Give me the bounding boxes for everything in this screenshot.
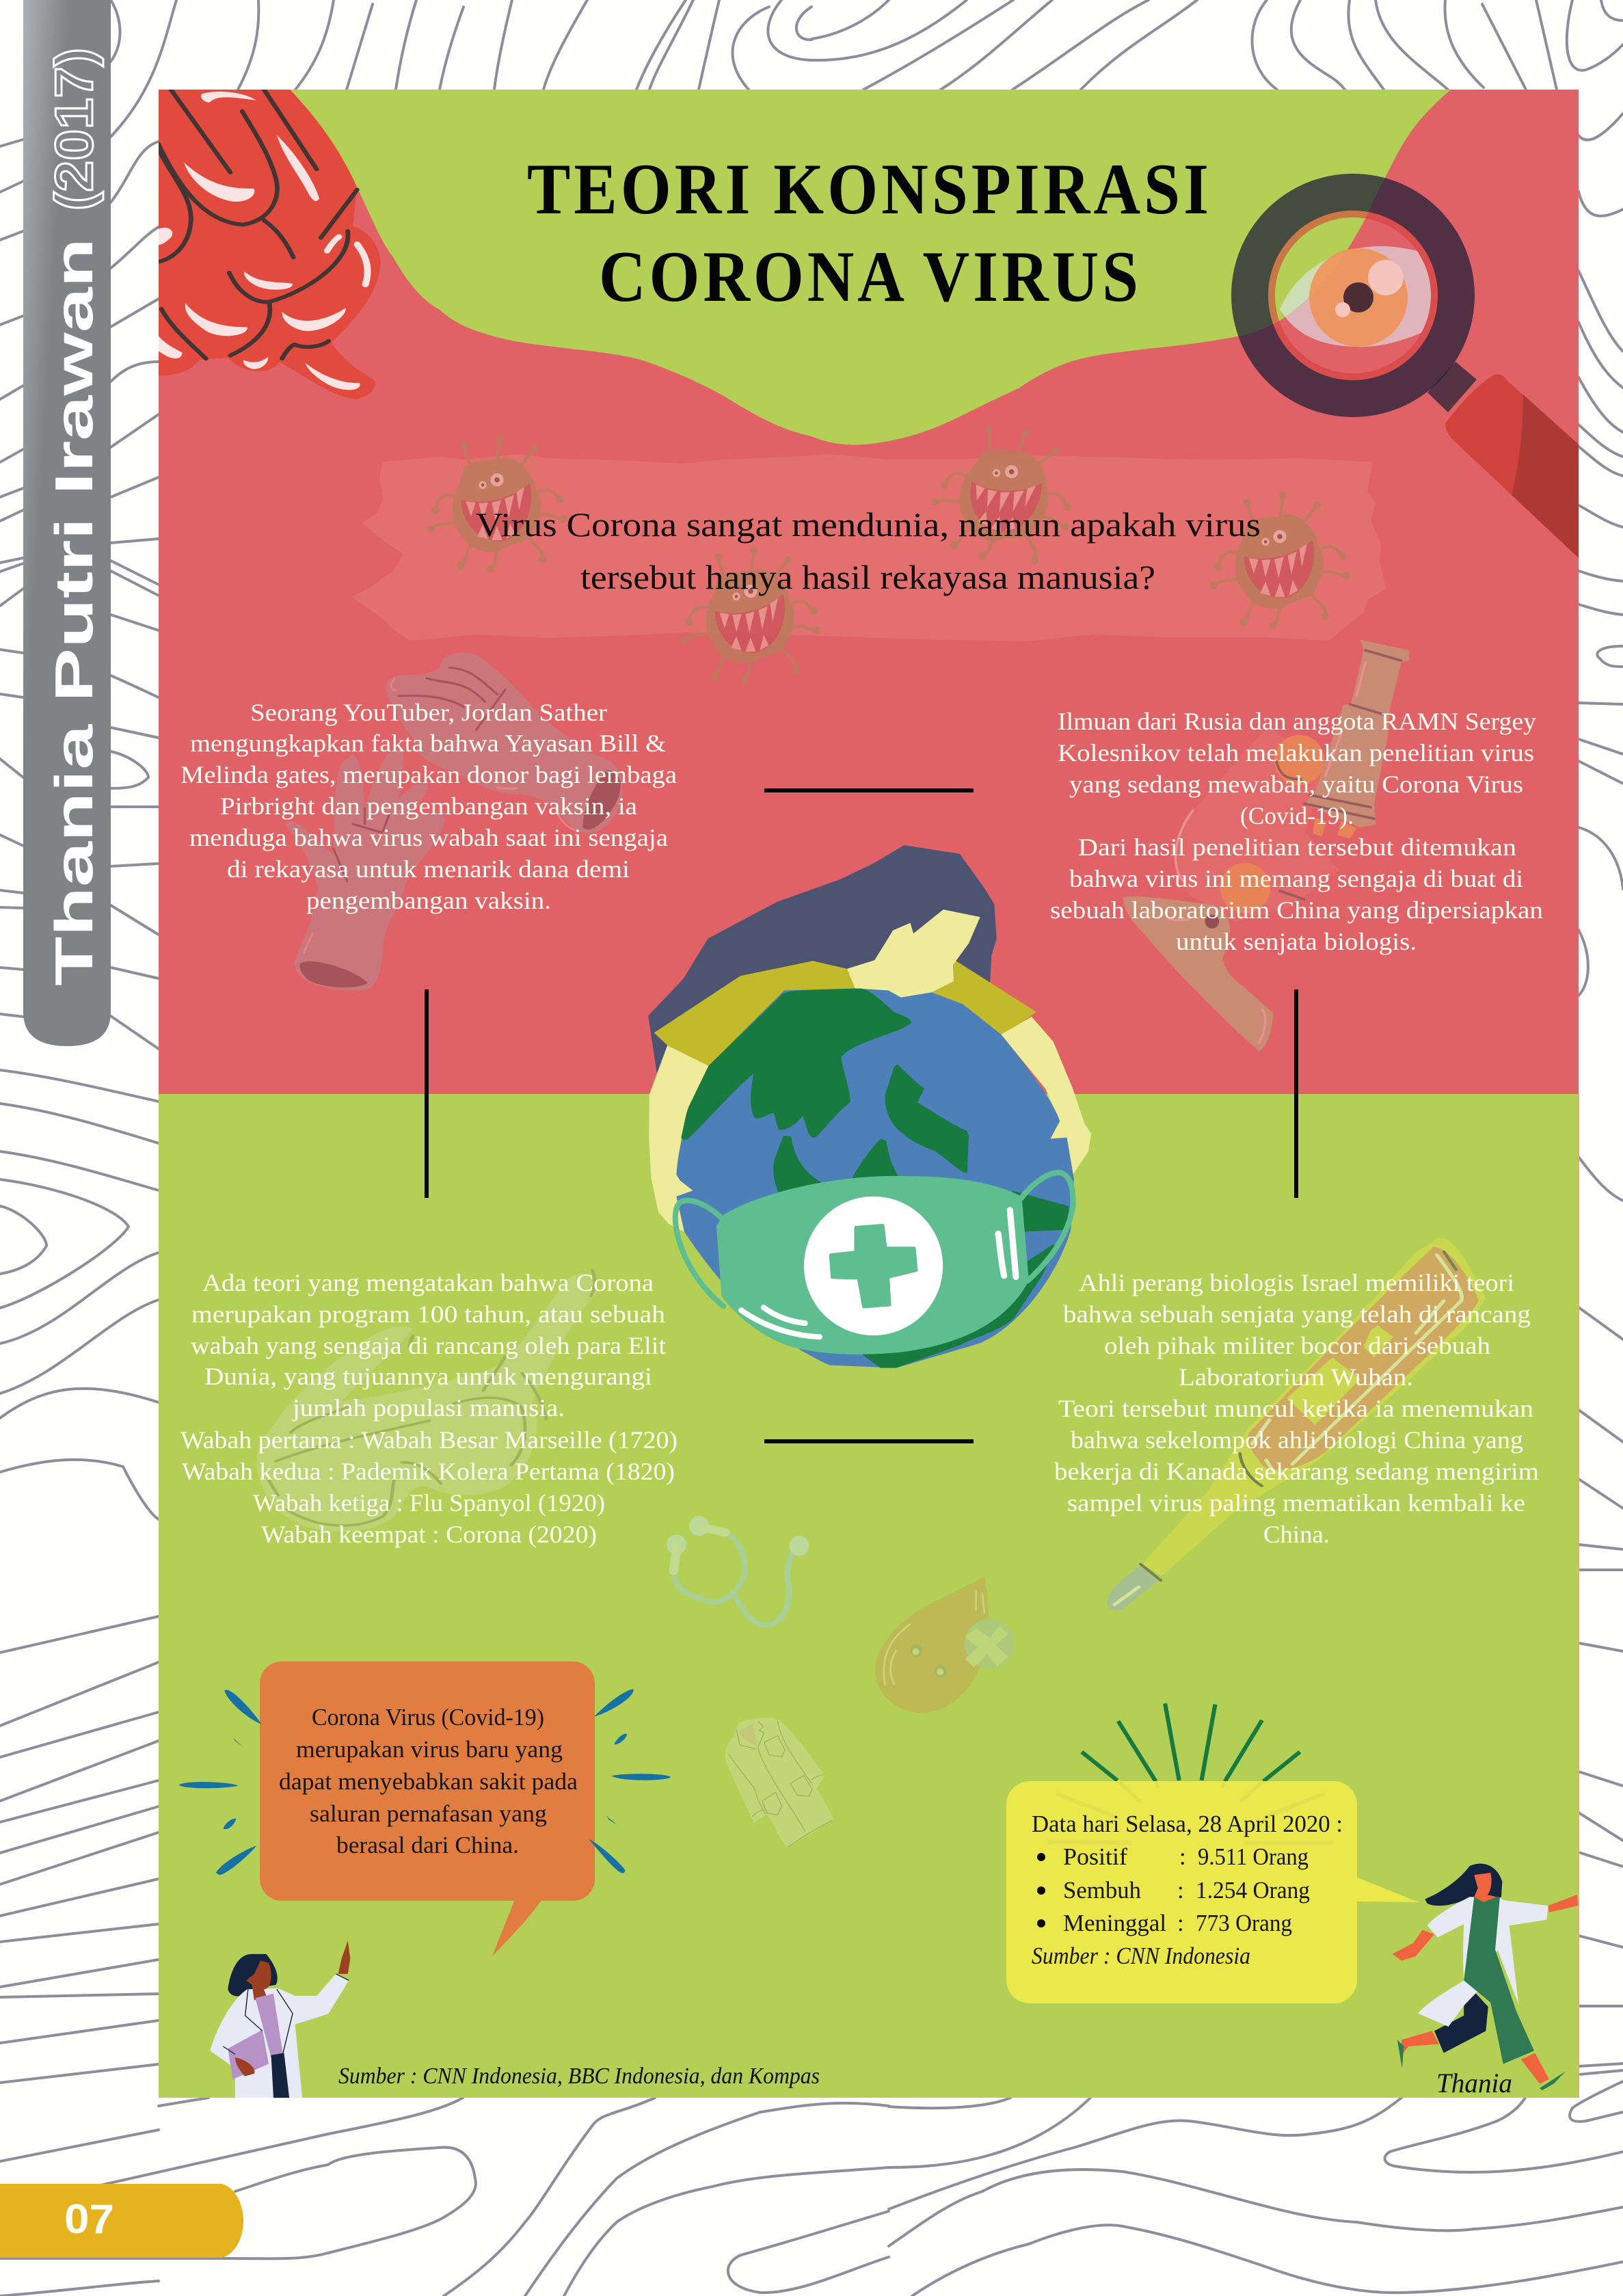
callout: orange speech bubble: merupakan virus baru yang [296,1736,563,1763]
text block: bottom-right theory: Ahli perang biologis Israel memiliki teori [1079,1269,1514,1296]
callout: yellow data bubble: 9.511 Orang [1198,1843,1309,1870]
callout: yellow data bubble [1006,1781,1419,2003]
header green blob [290,90,1451,445]
icon: faint microscope [1123,640,1409,1052]
text block: top-right theory: yang sedang mewabah, yaitu Corona Virus [1069,771,1523,798]
text block: top-right theory [1050,708,1543,955]
icon: magnifying glass with eye [1231,174,1579,558]
title [527,148,1209,317]
callout: orange speech bubble [260,1661,595,1956]
page number tab: 07 [64,2196,114,2242]
sidebar tab with author name [23,0,111,1046]
question text [476,505,1261,596]
sidebar tab with author name: Thania Putri Irawan [44,238,104,986]
title: TEORI KONSPIRASI [527,148,1209,229]
text block: top-right theory: Ilmuan dari Rusia dan anggota RAMN Sergey [1058,708,1536,735]
callout: yellow data bubble: Data hari Selasa, 28 April 2020 : [1032,1811,1343,1837]
icon: green sunburst rays [1082,1703,1300,1781]
callout: yellow data bubble: 773 Orang [1196,1910,1292,1936]
divider lines around globe [425,788,1298,1443]
callout: yellow data bubble: : [1179,1843,1186,1870]
icon: blue burst rays [179,1689,671,1875]
text block: bottom-left theory [180,1269,678,1548]
callout: yellow data bubble: Meninggal [1063,1910,1166,1936]
icon: faint thermometer [1107,1238,1486,1610]
text block: top-left theory [180,699,677,914]
text block: top-left theory: Pirbright dan pengembangan vaksin, ia [220,792,637,820]
text block: top-right theory: bahwa virus ini memang sengaja di buat di [1069,865,1523,892]
text block: top-right theory: Kolesnikov telah melakukan penelitian virus [1058,739,1534,766]
callout: yellow data bubble: Sembuh [1063,1877,1141,1904]
text block: top-left theory: menduga bahwa virus wabah saat ini sengaja [189,824,668,851]
text block: top-left theory: Seorang YouTuber, Jordan Sather [250,699,607,726]
callout: orange speech bubble: dapat menyebabkan sakit pada [279,1768,578,1795]
text block: top-right theory: sebuah laboratorium China yang dipersiapkan [1050,896,1543,924]
text block: bottom-right theory: Laboratorium Wuhan. [1179,1363,1413,1391]
text block: bottom-right theory: bahwa sebuah senjata yang telah di rancang [1063,1300,1531,1328]
title: CORONA VIRUS [599,236,1138,317]
callout: yellow data bubble: 1.254 Orang [1196,1877,1310,1904]
text block: top-left theory: mengungkapkan fakta bahwa Yayasan Bill & [190,730,666,757]
text block: bottom-right theory: bahwa sekelompok ahli biologi China yang [1071,1426,1523,1454]
text block: bottom-right theory [1054,1269,1539,1548]
question text: Virus Corona sangat mendunia, namun apakah virus [476,505,1261,544]
text block: top-left theory: pengembangan vaksin. [306,887,551,914]
text block: top-right theory: untuk senjata biologis. [1176,928,1417,955]
virus decorations [427,410,1350,684]
text block: bottom-right theory: sampel virus paling mematikan kembali ke [1067,1489,1525,1517]
text block: top-left theory: di rekayasa untuk menarik dana demi [227,855,630,883]
icon: faint goggles [257,1270,598,1532]
text block: bottom-left theory: Wabah pertama : Wabah Besar Marseille (1720) [180,1426,678,1454]
illustration: running doctor right [1392,1864,1578,2090]
source citation: Sumber : CNN Indonesia, BBC Indonesia, dan Kompas [338,2064,820,2089]
callout: yellow data bubble: : [1177,1910,1184,1936]
callout: yellow data bubble: Positif [1063,1843,1127,1870]
central illustration: hands hugging masked globe [648,845,1091,1368]
sidebar tab with author name: (2017) [44,48,104,211]
text block: bottom-left theory: Ada teori yang mengatakan bahwa Corona [202,1269,654,1296]
icon: faint stethoscope [667,1516,809,1625]
text block: top-left theory: Melinda gates, merupakan donor bagi lembaga [180,761,677,788]
brush stroke behind question [352,454,1386,641]
text block: bottom-left theory: wabah yang sengaja di rancang oleh para Elit [191,1332,666,1359]
text block: bottom-left theory: merupakan program 100 tahun, atau sebuah [191,1300,665,1328]
text block: bottom-right theory: China. [1263,1521,1330,1548]
text block: bottom-right theory: bekerja di Kanada sekarang sedang mengirim [1054,1458,1539,1485]
illustration: doctor woman left [210,1941,350,2098]
callout: yellow data bubble: : [1177,1877,1184,1904]
icon: faint lab coat [725,1718,834,1848]
text block: bottom-left theory: Wabah kedua : Pademik Kolera Pertama (1820) [182,1458,675,1485]
callout: orange speech bubble: berasal dari China. [336,1832,519,1858]
text block: bottom-right theory: Teori tersebut muncul ketika ia menemukan [1058,1395,1533,1422]
panel: main poster background [159,90,1579,2098]
callout: orange speech bubble: saluran pernafasan yang [310,1800,547,1827]
text block: bottom-left theory: Dunia, yang tujuannya untuk mengurangi [204,1363,652,1390]
text block: bottom-right theory: oleh pihak militer bocor dari sebuah [1104,1332,1490,1359]
text block: top-right theory: Dari hasil penelitian tersebut ditemukan [1078,833,1516,861]
text block: bottom-left theory: Wabah keempat : Corona (2020) [261,1521,597,1548]
question text: tersebut hanya hasil rekayasa manusia? [580,558,1155,596]
text block: top-right theory: (Covid-19). [1240,802,1354,829]
text block: bottom-left theory: jumlah populasi manusia. [291,1394,565,1421]
callout: yellow data bubble: Sumber : CNN Indonesia [1032,1943,1250,1969]
callout: orange speech bubble: Corona Virus (Covid-19) [312,1704,544,1731]
page number tab [0,2184,243,2258]
icon: brain [159,90,381,399]
signature: Thania [1436,2068,1512,2098]
icon: faint virus droplet [875,1577,1015,1713]
text block: bottom-left theory: Wabah ketiga : Flu Spanyol (1920) [253,1489,605,1517]
icon: faint gloves [286,652,622,991]
